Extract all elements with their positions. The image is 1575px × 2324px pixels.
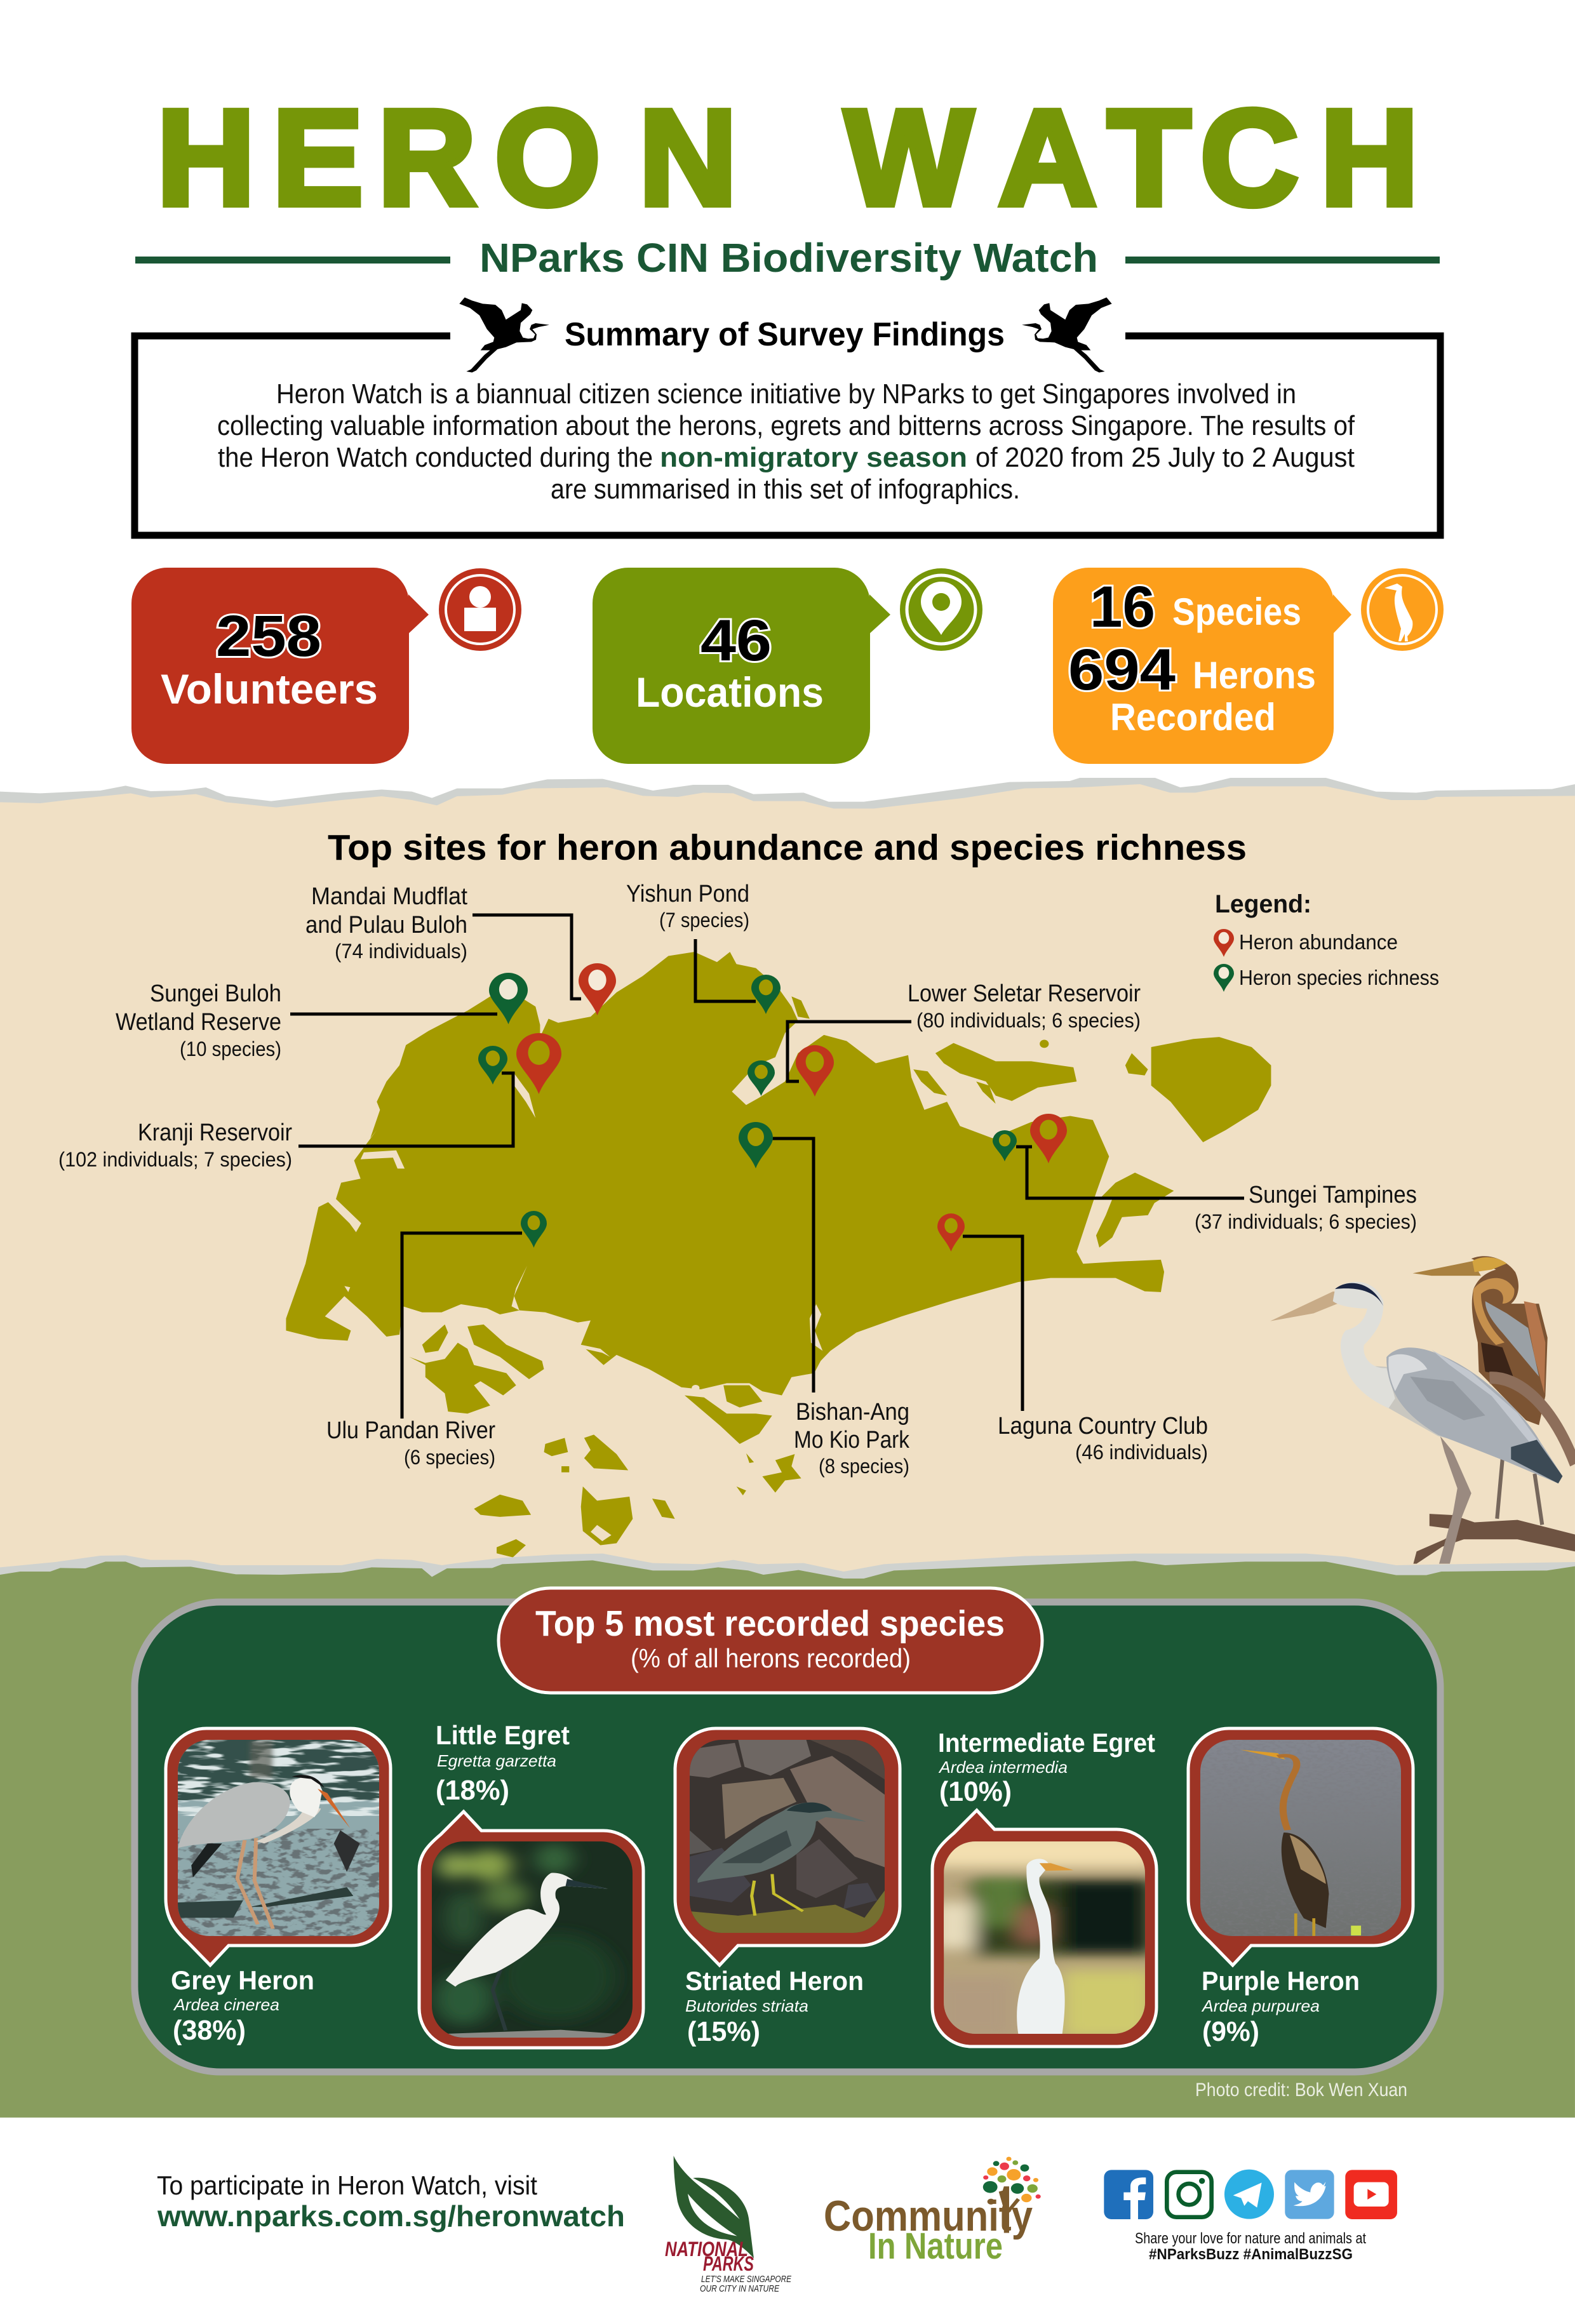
species label: grey heron: (38%) <box>173 2015 246 2046</box>
site labels: (8 species) <box>819 1455 909 1478</box>
panel: top 5 species <box>135 1588 1440 2072</box>
species label: grey heron <box>171 1965 314 2046</box>
site labels: Mo Kio Park <box>794 1427 910 1453</box>
panel: green band torn edge <box>0 1554 1575 2118</box>
site labels: Yishun Pond <box>626 881 749 907</box>
species label: little egret: (18%) <box>436 1775 509 1806</box>
social hashtags: Share your love for nature and animals at <box>1135 2230 1366 2247</box>
stat card: locations: Locations <box>636 669 824 716</box>
callout frame: little egret <box>419 1812 643 2048</box>
stat card: species and herons recorded <box>1053 568 1444 764</box>
social hashtags: #NParksBuzz #AnimalBuzzSG <box>1149 2246 1353 2263</box>
species label: purple heron: Purple Heron <box>1202 1966 1360 1996</box>
pin: Ulu Pandan <box>521 1211 547 1248</box>
call to action <box>157 2170 625 2233</box>
site labels: Bishan-Ang <box>796 1399 909 1426</box>
legend: Heron abundance <box>1239 930 1398 954</box>
legend <box>1214 890 1439 992</box>
site labels: (10 species) <box>180 1038 281 1060</box>
site labels: Sungei Buloh <box>150 980 281 1007</box>
stat card: volunteers: 258 <box>216 604 321 669</box>
logo: Community in Nature <box>824 2157 1041 2267</box>
callout frame: purple heron <box>1188 1728 1413 1965</box>
site labels: Kranji Reservoir <box>138 1119 292 1146</box>
stat card: species and herons recorded: Species <box>1172 591 1301 633</box>
legend: Legend: <box>1215 890 1311 918</box>
site labels: Laguna Country Club <box>998 1413 1208 1439</box>
pin: Tampines abundance <box>1030 1114 1067 1163</box>
pin: Bishan <box>739 1122 773 1168</box>
pin: Lower Seletar abundance <box>796 1045 834 1097</box>
panel heading: Summary of Survey Findings <box>565 316 1005 353</box>
intro paragraph: Heron Watch is a biannual citizen science initiative by NParks to get Singapores involved in <box>276 378 1296 410</box>
species label: intermediate egret: (10%) <box>939 1776 1012 1807</box>
species label: striated heron: Butorides striata <box>685 1996 808 2015</box>
photo: intermediate egret <box>944 1841 1145 2034</box>
heading pill: Top 5 most recorded species <box>535 1603 1005 1644</box>
intro paragraph: non-migratory season <box>660 442 967 473</box>
species label: grey heron: Ardea cinerea <box>173 1995 279 2014</box>
call to action: To participate in Heron Watch, visit <box>157 2170 537 2200</box>
photo: grey heron <box>178 1740 379 1936</box>
icon: person <box>439 568 521 651</box>
pin: Tampines species <box>993 1130 1017 1161</box>
species label: purple heron <box>1201 1966 1360 2047</box>
icon: youtube <box>1345 2170 1397 2219</box>
pin: Lower Seletar species <box>747 1060 775 1096</box>
panel: map background torn paper <box>0 778 1575 1594</box>
icon: flying heron left <box>459 297 549 373</box>
title: HERON WATCH <box>157 82 1419 234</box>
site labels: Ulu Pandan River <box>326 1417 495 1444</box>
heading pill: (% of all herons recorded) <box>631 1643 911 1673</box>
pin: Kranji abundance <box>516 1033 561 1094</box>
icon: twitter <box>1285 2170 1334 2219</box>
intro paragraph: collecting valuable information about the herons, egrets and bitterns across Singapore. The results of <box>217 410 1355 441</box>
pin: Kranji species <box>478 1046 507 1085</box>
intro paragraph: the Heron Watch conducted during the <box>218 442 653 473</box>
species label: purple heron: (9%) <box>1202 2016 1259 2047</box>
legend: Heron species richness <box>1239 966 1439 989</box>
stat card: species and herons recorded: 16 <box>1090 575 1155 639</box>
species label: striated heron: Striated Heron <box>685 1966 864 1996</box>
pin: Laguna <box>937 1213 965 1252</box>
callout frame: intermediate egret <box>932 1810 1156 2047</box>
species label: purple heron: Ardea purpurea <box>1201 1996 1320 2015</box>
social media icons <box>1104 2170 1397 2219</box>
pin: Yishun <box>751 975 781 1014</box>
site labels: Mandai Mudflat <box>311 883 467 910</box>
logo: Community in Nature: In Nature <box>868 2226 1003 2267</box>
logo: National Parks <box>665 2156 792 2294</box>
site labels: Sungei Tampines <box>1249 1182 1417 1208</box>
species label: grey heron: Grey Heron <box>171 1965 314 1995</box>
icon: instagram <box>1167 2172 1212 2217</box>
species label: little egret <box>436 1720 570 1806</box>
site labels: (7 species) <box>659 909 749 932</box>
species label: striated heron: (15%) <box>687 2016 760 2047</box>
stat card: species and herons recorded: Herons <box>1193 654 1316 697</box>
logo: National Parks: LET'S MAKE SINGAPORE <box>701 2274 792 2285</box>
species label: intermediate egret: Intermediate Egret <box>938 1728 1155 1758</box>
stat card: locations <box>593 568 982 764</box>
site labels: (80 individuals; 6 species) <box>916 1009 1141 1032</box>
photo: purple heron <box>1200 1740 1401 1936</box>
stat card: volunteers <box>131 568 521 764</box>
stat card: species and herons recorded: Recorded <box>1110 696 1276 738</box>
heading: top sites: Top sites for heron abundance and species richness <box>328 827 1247 868</box>
icon: flying heron right <box>1022 297 1112 373</box>
stat card: volunteers: Volunteers <box>161 665 378 712</box>
site labels: (46 individuals) <box>1075 1441 1208 1464</box>
leader lines <box>290 915 1244 1419</box>
site labels: (102 individuals; 7 species) <box>58 1148 292 1171</box>
illustration: herons on branch <box>1270 1256 1575 1564</box>
logo: National Parks: NATIONAL <box>665 2238 748 2261</box>
subtitle with rules <box>135 235 1440 281</box>
pin: Mandai <box>579 963 616 1015</box>
social hashtags <box>1135 2230 1366 2263</box>
intro paragraph: are summarised in this set of infographics. <box>551 474 1020 505</box>
species label: intermediate egret: Ardea intermedia <box>938 1758 1068 1777</box>
intro paragraph <box>217 378 1355 505</box>
map of Singapore <box>286 952 1271 1558</box>
callout frame: grey heron <box>166 1728 391 1965</box>
icon: telegram <box>1224 2170 1274 2219</box>
panel: summary of survey findings <box>135 297 1440 535</box>
species label: little egret: Little Egret <box>436 1720 570 1750</box>
callout frame: striated heron <box>675 1728 900 1965</box>
photo credit: Photo credit: Bok Wen Xuan <box>1195 2080 1407 2100</box>
intro paragraph: of 2020 from 25 July to 2 August <box>975 442 1355 473</box>
pin: Sungei Buloh <box>489 973 528 1024</box>
site labels: (74 individuals) <box>335 940 467 963</box>
icon: tree of leaves <box>983 2157 1041 2233</box>
subtitle with rules: NParks CIN Biodiversity Watch <box>479 235 1098 281</box>
site labels: (37 individuals; 6 species) <box>1195 1210 1417 1233</box>
logo: National Parks: OUR CITY IN NATURE <box>700 2283 780 2294</box>
logo: Community in Nature: Community <box>824 2192 1033 2240</box>
photo: little egret <box>431 1841 634 2038</box>
heading pill <box>499 1588 1042 1693</box>
icon: facebook <box>1104 2170 1153 2219</box>
site labels: Lower Seletar Reservoir <box>908 980 1141 1007</box>
species label: striated heron <box>685 1966 864 2047</box>
species label: little egret: Egretta garzetta <box>437 1751 556 1770</box>
call to action: www.nparks.com.sg/heronwatch <box>157 2200 625 2233</box>
site labels: Wetland Reserve <box>116 1009 281 1036</box>
icon: egret <box>1361 568 1444 651</box>
species label: intermediate egret <box>938 1728 1155 1807</box>
photo: striated heron <box>690 1740 885 1933</box>
site labels: and Pulau Buloh <box>305 912 467 938</box>
site labels <box>58 881 1417 1478</box>
stat card: locations: 46 <box>700 608 772 673</box>
site labels: (6 species) <box>404 1446 495 1469</box>
logo: National Parks: PARKS <box>703 2252 754 2275</box>
icon: location pin <box>900 568 982 651</box>
stat card: species and herons recorded: 694 <box>1068 638 1176 702</box>
